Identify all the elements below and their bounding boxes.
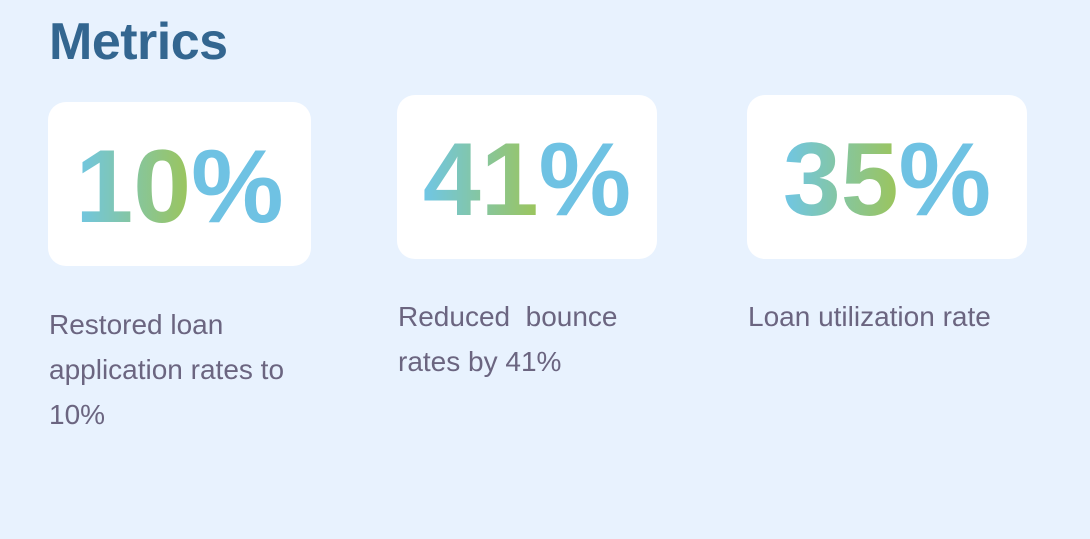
number: 35%: 35% — [783, 122, 991, 238]
label: loan utilization: Loan utilization rate — [748, 301, 991, 332]
label: restored loan: Restored loan application rates to 10% — [49, 309, 284, 430]
number: 10%: 10% — [75, 129, 284, 245]
card: 41% — [397, 95, 657, 259]
label: reduced bounce: Reduced bounce rates by 41% — [398, 301, 618, 377]
card: 10% — [48, 102, 311, 266]
card: 35% — [747, 95, 1027, 259]
title: Metrics — [49, 13, 228, 71]
number: 41%: 41% — [423, 122, 631, 238]
